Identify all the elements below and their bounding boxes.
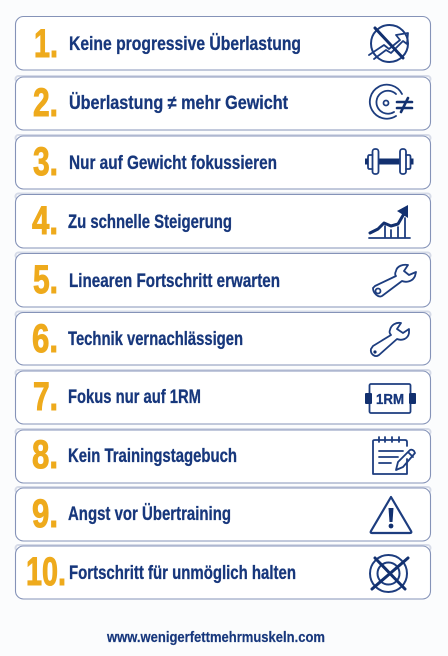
- item 3: Nur auf Gewicht fokussieren: Nur auf Gewicht fokussieren: [69, 153, 277, 174]
- item 3: Nur auf Gewicht fokussieren: 3.: [33, 140, 58, 184]
- item 8: Kein Trainingstagebuch: Kein Trainingstagebuch: [68, 446, 237, 467]
- footer website: www.wenigerfettmehrmuskeln.com: [106, 630, 325, 646]
- icon: notepad with pen: [373, 437, 415, 474]
- item 7: Fokus nur auf 1RM: 7.: [33, 375, 58, 419]
- item 10: Fortschritt für unmöglich halten: Fortschritt für unmöglich halten: [69, 563, 296, 584]
- item 2: Überlastung ≠ mehr Gewicht: Überlastung ≠ mehr Gewicht: [69, 93, 289, 114]
- item 1: Keine progressive Überlastung: 1.: [34, 22, 58, 66]
- item 2: Überlastung ≠ mehr Gewicht: 2.: [33, 81, 58, 125]
- icon: rising chart arrow: [369, 205, 410, 238]
- icon: dumbbell: [365, 149, 414, 174]
- item 6: Technik vernachlässigen: 6.: [32, 317, 58, 361]
- icon: 1RM plate: 1RM: [376, 391, 404, 408]
- item 9: Angst vor Übertraining: Angst vor Übertraining: [68, 504, 231, 525]
- icon: crossed-out progress arrow: [369, 25, 408, 62]
- icon: wrench: [371, 323, 409, 356]
- item 5: Linearen Fortschritt erwarten: 5.: [33, 258, 58, 302]
- icon: weight plate with not-equal sign: [370, 85, 412, 119]
- item 6: Technik vernachlässigen: Technik vernachlässigen: [68, 329, 243, 350]
- item 8: Kein Trainingstagebuch: 8.: [32, 433, 58, 477]
- item 10: Fortschritt für unmöglich halten: [16, 545, 430, 599]
- item 7: Fokus nur auf 1RM: Fokus nur auf 1RM: [68, 387, 201, 408]
- item 4: Zu schnelle Steigerung: [16, 194, 430, 248]
- item 2: Überlastung ≠ mehr Gewicht: [16, 76, 430, 130]
- item 1: Keine progressive Überlastung: [16, 16, 430, 70]
- item 9: Angst vor Übertraining: [16, 487, 430, 541]
- item 10: Fortschritt für unmöglich halten: 10.: [26, 550, 66, 594]
- icon: crossed-out target: [370, 555, 408, 592]
- item 4: Zu schnelle Steigerung: Zu schnelle Steigerung: [68, 212, 232, 233]
- icon: 1RM plate: [365, 384, 416, 413]
- item 6: Technik vernachlässigen: [16, 312, 430, 365]
- item 3: Nur auf Gewicht fokussieren: [16, 135, 430, 189]
- item 7: Fokus nur auf 1RM: [16, 370, 430, 424]
- item 9: Angst vor Übertraining: 9.: [32, 492, 58, 536]
- item 4: Zu schnelle Steigerung: 4.: [32, 199, 58, 243]
- item 1: Keine progressive Überlastung: Keine progressive Überlastung: [69, 34, 301, 55]
- icon: warning triangle: [371, 497, 411, 533]
- item 8: Kein Trainingstagebuch: [16, 429, 430, 483]
- icon: wrench: [373, 265, 416, 296]
- item 5: Linearen Fortschritt erwarten: [16, 252, 430, 307]
- item 5: Linearen Fortschritt erwarten: Linearen Fortschritt erwarten: [69, 271, 280, 292]
